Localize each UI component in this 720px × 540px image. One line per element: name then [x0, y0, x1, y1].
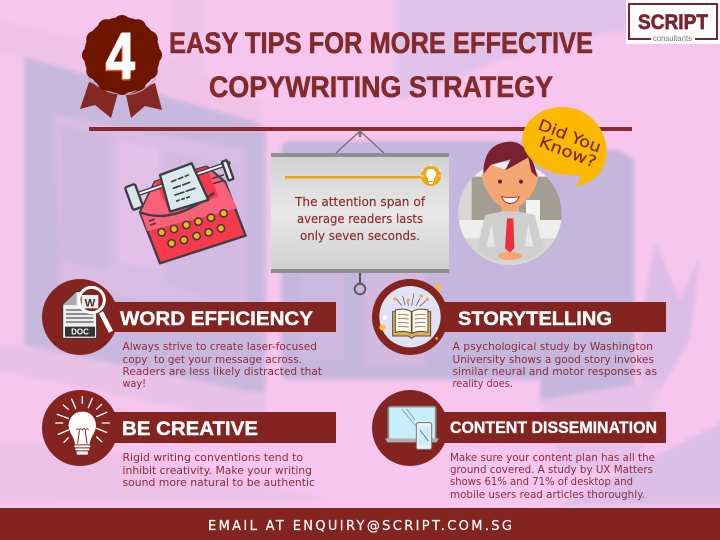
title: [169, 27, 593, 104]
screen text: average readers lasts: [297, 211, 423, 226]
icon: document with magnifier: W: [85, 298, 96, 310]
icon: typewriter: [125, 160, 246, 263]
panel: word efficiency: copy to get your message across.: [122, 353, 302, 366]
footer bar with email: [0, 508, 720, 540]
icon: light bulb: [56, 397, 109, 455]
speech bubble: did you know: [522, 107, 607, 187]
screen text: only seven seconds.: [300, 228, 420, 243]
icon: open book: [379, 284, 441, 347]
panel: be creative: BE CREATIVE: [122, 418, 258, 440]
face: [482, 157, 538, 208]
screen text: The attention span of: [294, 194, 426, 209]
badge: number 4: 4: [105, 20, 134, 95]
icon: document with magnifier: DOC: [71, 328, 89, 337]
header rule: [89, 127, 632, 131]
character illustration with office circle: [457, 142, 563, 268]
panel: word efficiency: Always strive to create laser-focused: [122, 340, 317, 353]
panel: content dissemination: ground covered. A study by UX Matters: [450, 463, 653, 476]
pull cord: [355, 273, 365, 294]
hanger: [336, 130, 384, 153]
panel: be creative: Rigid writing conventions tend to: [122, 451, 303, 464]
panel: content dissemination: Make sure your content plan has all the: [450, 451, 655, 464]
screen text: [294, 194, 426, 243]
ribbon tails: [80, 82, 162, 118]
footer bar with email: EMAIL AT ENQUIRY@SCRIPT.COM.SG: [208, 519, 512, 534]
panel: content dissemination: shows 61% and 71% of desktop and: [450, 475, 633, 488]
logo: Script Consultants: consultants: [653, 34, 692, 43]
badge: number 4: [80, 15, 162, 118]
icon: document with magnifier: [63, 287, 111, 338]
tie: [505, 218, 514, 253]
icon: light bulb badge: [421, 164, 441, 186]
panel: word efficiency: way!: [122, 377, 146, 390]
panel: be creative: [42, 390, 336, 489]
panel: storytelling: University shows a good story invokes: [452, 353, 654, 366]
title: COPYWRITING STRATEGY: [209, 71, 553, 104]
icon: laptop and phone: [385, 407, 439, 449]
panel: word efficiency: [42, 279, 336, 390]
panel: content dissemination: [372, 390, 666, 501]
speech bubble: did you know: Know?: [537, 133, 599, 171]
panel: storytelling: A psychological study by Washington: [452, 340, 653, 353]
projector screen panel: [271, 130, 449, 294]
panel: storytelling: similar neural and motor responses as: [452, 365, 657, 378]
shirt: [477, 212, 543, 260]
logo: Script Consultants: SCRIPT: [638, 11, 708, 34]
panel: content dissemination: CONTENT DISSEMINATION: [450, 419, 657, 437]
badge: number 4: 4: [106, 19, 135, 92]
speech bubble: did you know: Did You: [536, 116, 604, 156]
panel: storytelling: reality does.: [452, 377, 513, 390]
panel: storytelling: STORYTELLING: [458, 308, 612, 330]
panel: word efficiency: Readers are less likely distracted that: [122, 365, 322, 378]
panel: be creative: sound more natural to be authentic: [122, 476, 315, 489]
panel: content dissemination: mobile users read articles thoroughly.: [450, 488, 645, 501]
logo: Script Consultants: [626, 0, 720, 44]
hair: [483, 142, 537, 177]
panel: be creative: inhibit creativity. Make your writing: [122, 464, 312, 477]
panel: storytelling: [372, 279, 666, 390]
title: EASY TIPS FOR MORE EFFECTIVE: [169, 27, 593, 60]
panel: word efficiency: WORD EFFICIENCY: [120, 308, 313, 330]
